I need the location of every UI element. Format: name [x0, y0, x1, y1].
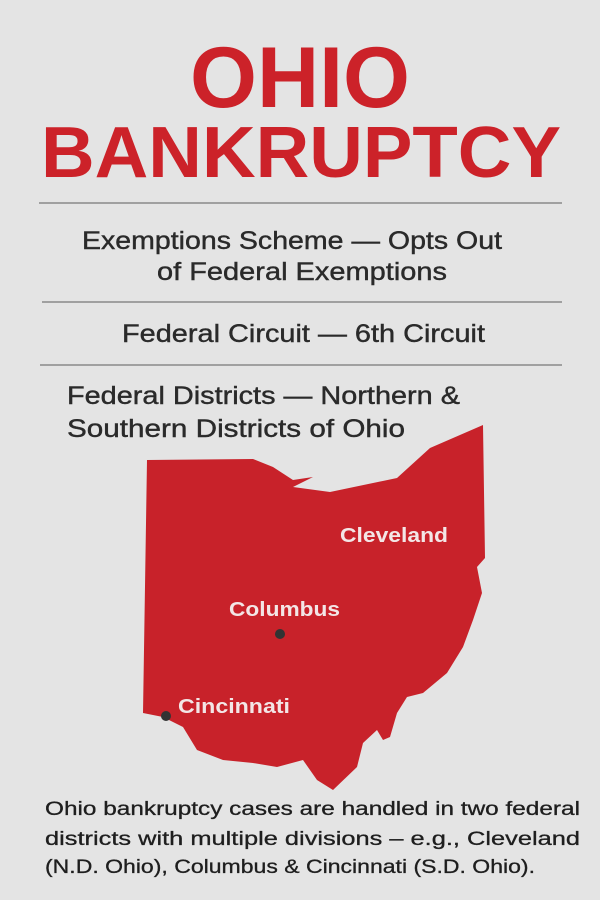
text block: districts: Federal Districts — Northern &	[67, 382, 460, 410]
footer text: districts with multiple divisions – e.g., Cleveland	[45, 829, 580, 850]
dot: Columbus	[275, 629, 285, 639]
text block: exemptions: of Federal Exemptions	[157, 258, 447, 286]
text block: circuit: Federal Circuit — 6th Circuit	[122, 320, 485, 348]
footer text	[45, 799, 580, 878]
text block: exemptions	[82, 227, 502, 286]
title: OHIO	[190, 30, 410, 126]
label: Cincinnati: Cincinnati	[178, 696, 290, 718]
footer text: (N.D. Ohio), Columbus & Cincinnati (S.D. Ohio).	[45, 857, 535, 878]
footer text: Ohio bankruptcy cases are handled in two federal	[45, 799, 580, 820]
text block: districts	[67, 382, 460, 443]
title: BANKRUPTCY	[41, 113, 561, 193]
label: Cleveland: Cleveland	[340, 525, 448, 547]
dot: Cincinnati	[161, 711, 171, 721]
map: Ohio	[143, 425, 485, 790]
text block: exemptions: Exemptions Scheme — Opts Out	[82, 227, 502, 255]
title	[41, 30, 561, 193]
label: Columbus: Columbus	[229, 599, 340, 621]
text block: districts: Southern Districts of Ohio	[67, 415, 405, 443]
